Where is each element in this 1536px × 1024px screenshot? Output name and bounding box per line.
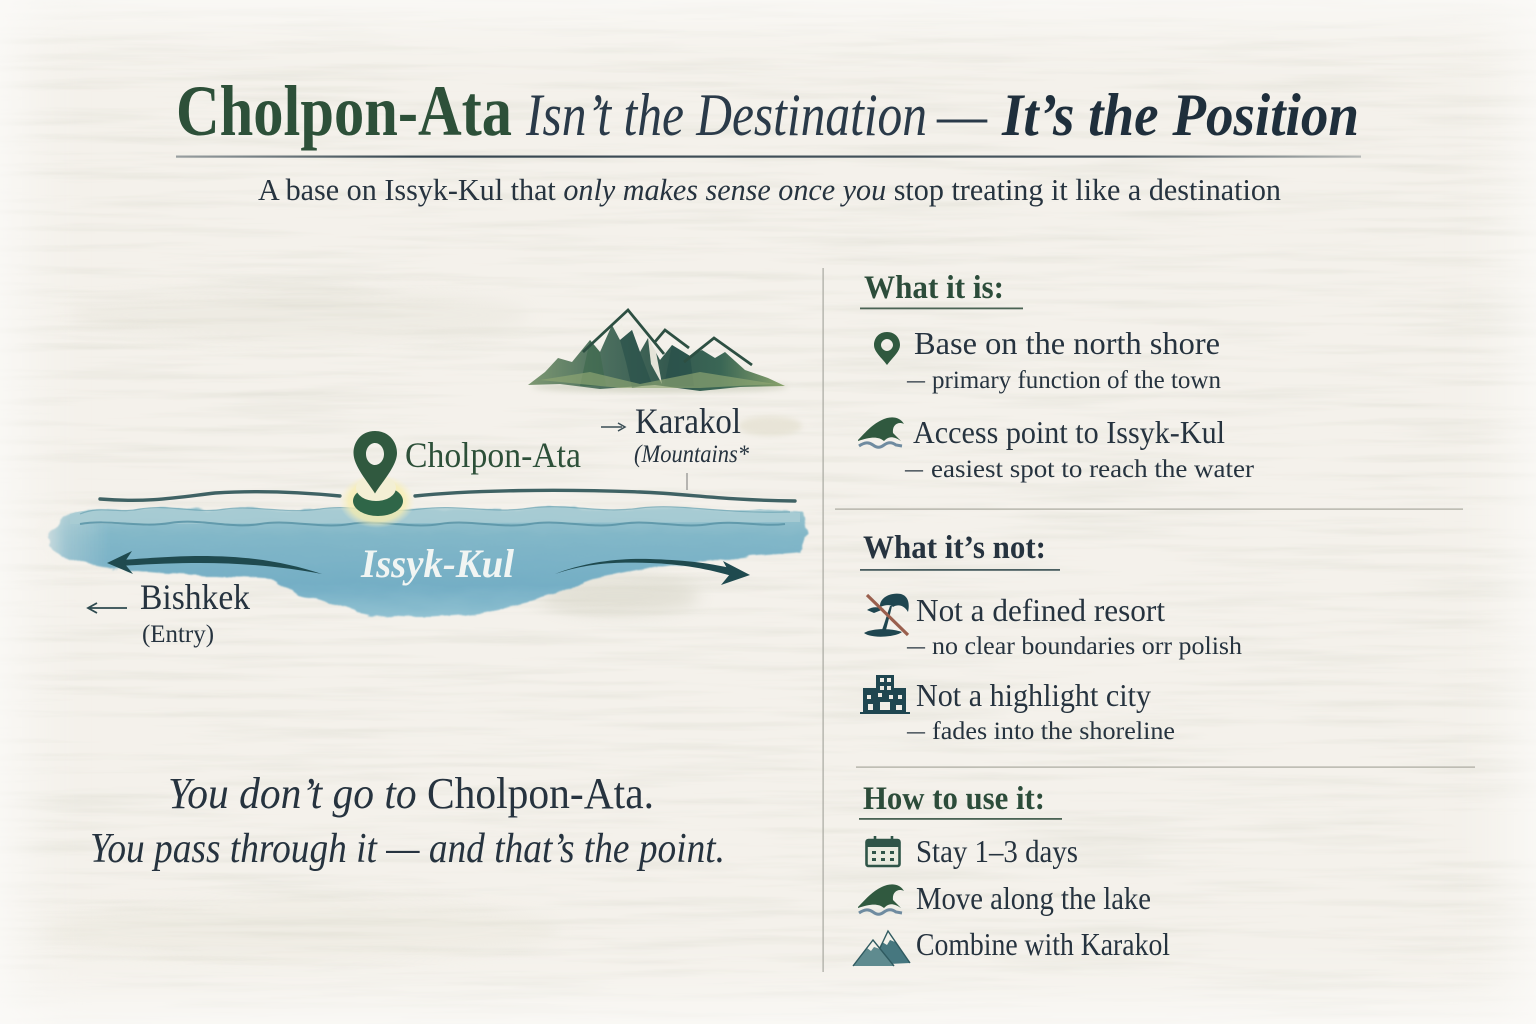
item: access point: — bbox=[904, 456, 924, 483]
label: Cholpon-Ata: Cholpon-Ata bbox=[405, 435, 581, 475]
item: not a highlight city: — bbox=[906, 718, 926, 745]
icon: location pin bbox=[354, 431, 397, 494]
shoreline bbox=[100, 490, 795, 501]
item: access point: Access point to Issyk-Kul bbox=[913, 414, 1225, 450]
icon: city building bbox=[860, 675, 910, 714]
item: access point: easiest spot to reach the water bbox=[931, 456, 1255, 483]
label: Karakol: (Mountains* bbox=[634, 441, 749, 468]
arrow: toward Karakol bbox=[555, 559, 750, 585]
title: It’s the Position bbox=[1001, 82, 1359, 148]
map illustration bbox=[37, 310, 807, 648]
quote: You don’t go to Cholpon-Ata. bbox=[168, 769, 654, 818]
item: move along the lake: Move along the lake bbox=[916, 880, 1151, 916]
item: base on the north shore: primary function of the town bbox=[932, 367, 1221, 394]
heading: how to use it: How to use it: bbox=[863, 781, 1045, 817]
item: combine with Karakol: Combine with Karakol bbox=[916, 926, 1170, 962]
icon: mountains bbox=[853, 931, 910, 966]
marker glow on shore bbox=[339, 474, 415, 528]
item: not a defined resort: Not a defined resort bbox=[916, 592, 1165, 628]
panel: what it's not bbox=[860, 530, 1243, 745]
item: not a defined resort: — bbox=[906, 633, 926, 660]
item: not a highlight city: fades into the shoreline bbox=[932, 718, 1175, 745]
lake: Issyk-Kul bbox=[37, 507, 807, 618]
item: base on the north shore: — bbox=[906, 367, 926, 394]
panel: how to use it bbox=[853, 781, 1170, 966]
item: not a highlight city bbox=[906, 677, 1175, 745]
quote: You pass through it — and that’s the point. bbox=[90, 826, 725, 872]
label: Karakol: Karakol bbox=[635, 401, 741, 441]
item: base on the north shore: Base on the north shore bbox=[914, 325, 1220, 361]
quote bbox=[90, 769, 725, 872]
label: Bishkek bbox=[88, 577, 250, 648]
item: not a defined resort: no clear boundaries orr polish bbox=[932, 633, 1243, 660]
label: Bishkek: (Entry) bbox=[142, 621, 214, 648]
arrow: toward Bishkek bbox=[107, 551, 322, 574]
title: — bbox=[936, 82, 988, 148]
item: access point bbox=[904, 414, 1255, 483]
item: not a defined resort bbox=[906, 592, 1243, 660]
heading: what it's not: What it’s not: bbox=[863, 530, 1046, 566]
label: Karakol bbox=[601, 401, 749, 490]
panel: what it is bbox=[858, 270, 1255, 483]
icon: mountains Karakol bbox=[528, 310, 788, 393]
title: Cholpon-Ata bbox=[176, 71, 512, 151]
item: base on the north shore bbox=[906, 325, 1221, 394]
icon: wave bbox=[858, 417, 904, 447]
item: stay: Stay 1–3 days bbox=[916, 833, 1078, 869]
title: Isn’t the Destination bbox=[525, 82, 927, 148]
subtitle: A base on Issyk-Kul that only makes sense once you stop treating it like a destination bbox=[258, 172, 1281, 207]
icon: wave bbox=[858, 884, 904, 914]
item: not a highlight city: Not a highlight city bbox=[916, 677, 1151, 713]
icon: pin bbox=[874, 332, 900, 365]
label: Issyk-Kul: Issyk-Kul bbox=[360, 541, 515, 586]
icon: crossed out beach umbrella bbox=[864, 594, 909, 637]
heading: what it is: What it is: bbox=[864, 270, 1004, 306]
title bbox=[176, 71, 1359, 151]
label: Bishkek: Bishkek bbox=[140, 577, 250, 617]
icon: calendar bbox=[866, 836, 900, 866]
